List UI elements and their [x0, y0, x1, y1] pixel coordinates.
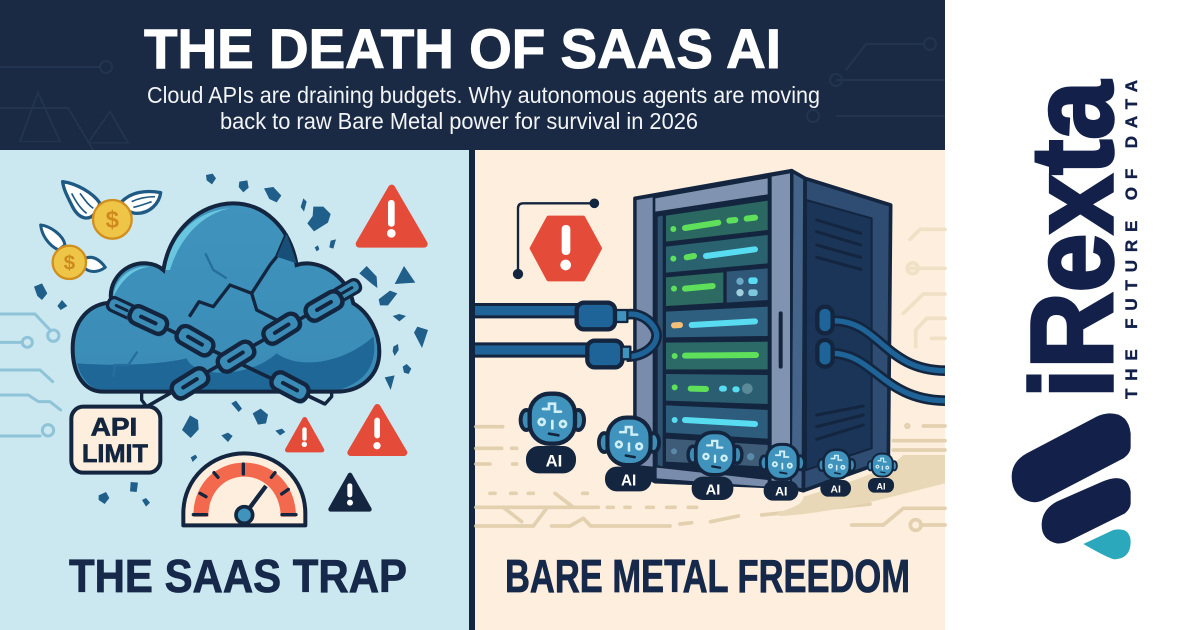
icon: flying coin small: $ — [64, 251, 76, 274]
cables left — [475, 311, 657, 357]
icon: broken cloud — [73, 203, 379, 392]
AI agent 5: AI — [830, 485, 841, 496]
alert trace — [514, 200, 598, 278]
title: THE DEATH OF SAAS AI — [144, 17, 781, 80]
divider — [469, 150, 475, 630]
logo: iRexta — [1007, 80, 1141, 559]
AI agent 2: AI — [621, 472, 636, 489]
circuit floor traces — [476, 229, 945, 530]
subtitle — [147, 82, 820, 134]
server vents — [817, 220, 863, 439]
icon: warning navy — [331, 475, 369, 509]
logo tagline: THE FUTURE OF DATA — [1122, 80, 1141, 399]
icon: stop alert — [532, 218, 600, 279]
server LEDs — [670, 218, 758, 460]
panel: bare metal freedom — [475, 150, 945, 630]
API limit tag: API — [91, 413, 137, 441]
server shelves — [666, 201, 768, 467]
icon: flying coin large — [63, 182, 161, 239]
logo mark — [1012, 413, 1131, 559]
cables right — [832, 321, 945, 401]
icon: speed gauge — [183, 453, 305, 525]
server rack — [635, 171, 891, 491]
AI agent 6: AI — [876, 481, 885, 491]
API limit tag: LIMIT — [82, 440, 149, 468]
cracks — [189, 233, 287, 320]
icon: warning medium — [351, 407, 404, 453]
AI agent 5 — [818, 450, 855, 497]
connectors right — [817, 307, 833, 367]
icon: flying coin large: $ — [106, 206, 119, 233]
heading: the SaaS trap: THE SAAS TRAP — [69, 550, 407, 602]
icon: warning large top — [359, 188, 424, 244]
AI agent 2 — [599, 418, 659, 491]
AI agent 6 — [868, 454, 897, 493]
subtitle: Cloud APIs are draining budgets. Why autonomous agents are moving — [147, 82, 820, 108]
header circuit decoration — [0, 38, 945, 214]
AI agent 4: AI — [775, 484, 788, 498]
AI agent 4 — [760, 444, 804, 501]
panel: the SaaS trap — [0, 150, 469, 630]
AI agent 1: AI — [546, 452, 562, 471]
debris shards — [34, 174, 428, 507]
AI agent 3: AI — [706, 483, 720, 499]
API limit tag — [71, 407, 160, 473]
subtitle: back to raw Bare Metal power for survival in 2026 — [220, 108, 698, 134]
panel: header band — [0, 0, 945, 214]
circuit traces — [0, 314, 61, 436]
heading: bare metal freedom: BARE METAL FREEDOM — [505, 550, 910, 602]
connectors left — [577, 303, 630, 367]
logo wordmark: iRexta — [1007, 80, 1137, 398]
chains — [104, 277, 364, 407]
icon: warning small — [287, 419, 322, 450]
AI agent 1 — [521, 394, 584, 473]
floor shadow — [777, 455, 945, 516]
AI agent 3 — [688, 432, 742, 500]
icon: flying coin small — [41, 225, 105, 279]
